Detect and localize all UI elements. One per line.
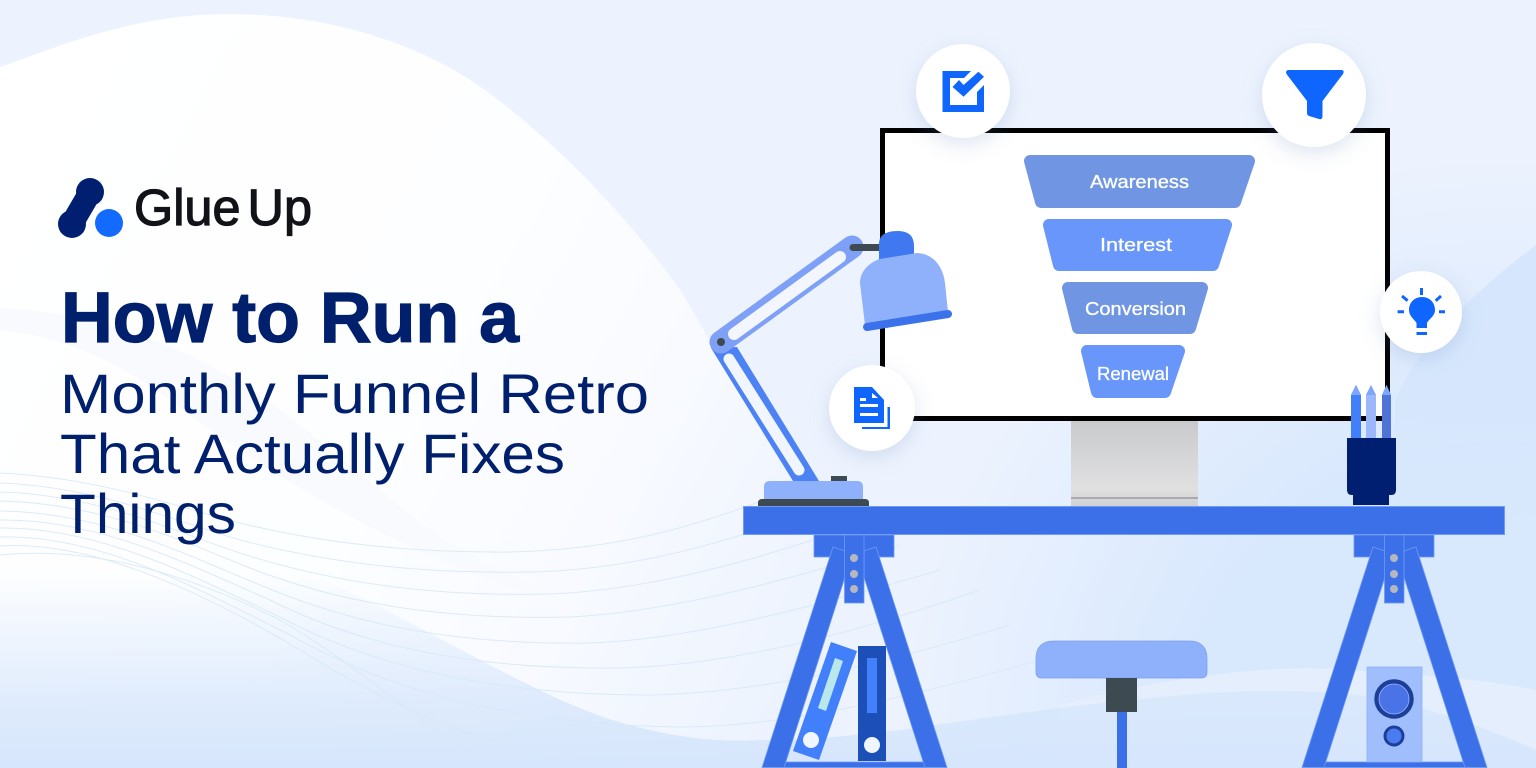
icon: funnel badge [1262,43,1366,147]
upright binder [858,646,886,761]
funnel stage: Interest: Interest [1100,235,1172,255]
funnel stage: Awareness [1030,161,1249,202]
lamp upper arm [721,247,852,342]
logo wordmark: Glue Up [134,179,312,236]
funnel stage: Awareness: Awareness [1090,172,1189,192]
lamp lower arm [711,347,819,481]
title [60,279,649,545]
monitor stand [1071,421,1198,506]
lamp base [831,476,847,481]
title line 3: That Actually Fixes [60,422,565,485]
funnel stage: Interest [1049,225,1226,265]
funnel stage: Renewal [1087,351,1179,392]
desk leg: left [762,535,947,768]
title line 4: Things [60,482,236,545]
pen cup [1347,385,1396,505]
speaker [1367,667,1422,762]
pencils [1351,385,1391,438]
lamp shade [879,231,914,260]
logo: Glue Up [58,178,312,238]
title line 1: How to Run a [61,279,520,358]
funnel chart [1030,161,1249,392]
stool [1036,641,1207,768]
desk lamp [711,231,948,506]
desk top [744,506,1504,534]
icon: light bulb badge [1380,271,1462,353]
desk leg: right [1302,535,1487,768]
logo mark [58,178,123,238]
lamp connector [853,244,882,251]
icon: document badge [829,365,915,451]
title line 2: Monthly Funnel Retro [60,362,649,425]
monitor screen [882,130,1388,418]
funnel stage: Conversion [1068,288,1202,328]
funnel stage: Conversion: Conversion [1085,299,1186,319]
funnel stage: Renewal: Renewal [1097,364,1169,384]
tilted binder [793,642,857,760]
binders [793,642,886,761]
icon: checklist badge [916,44,1010,138]
